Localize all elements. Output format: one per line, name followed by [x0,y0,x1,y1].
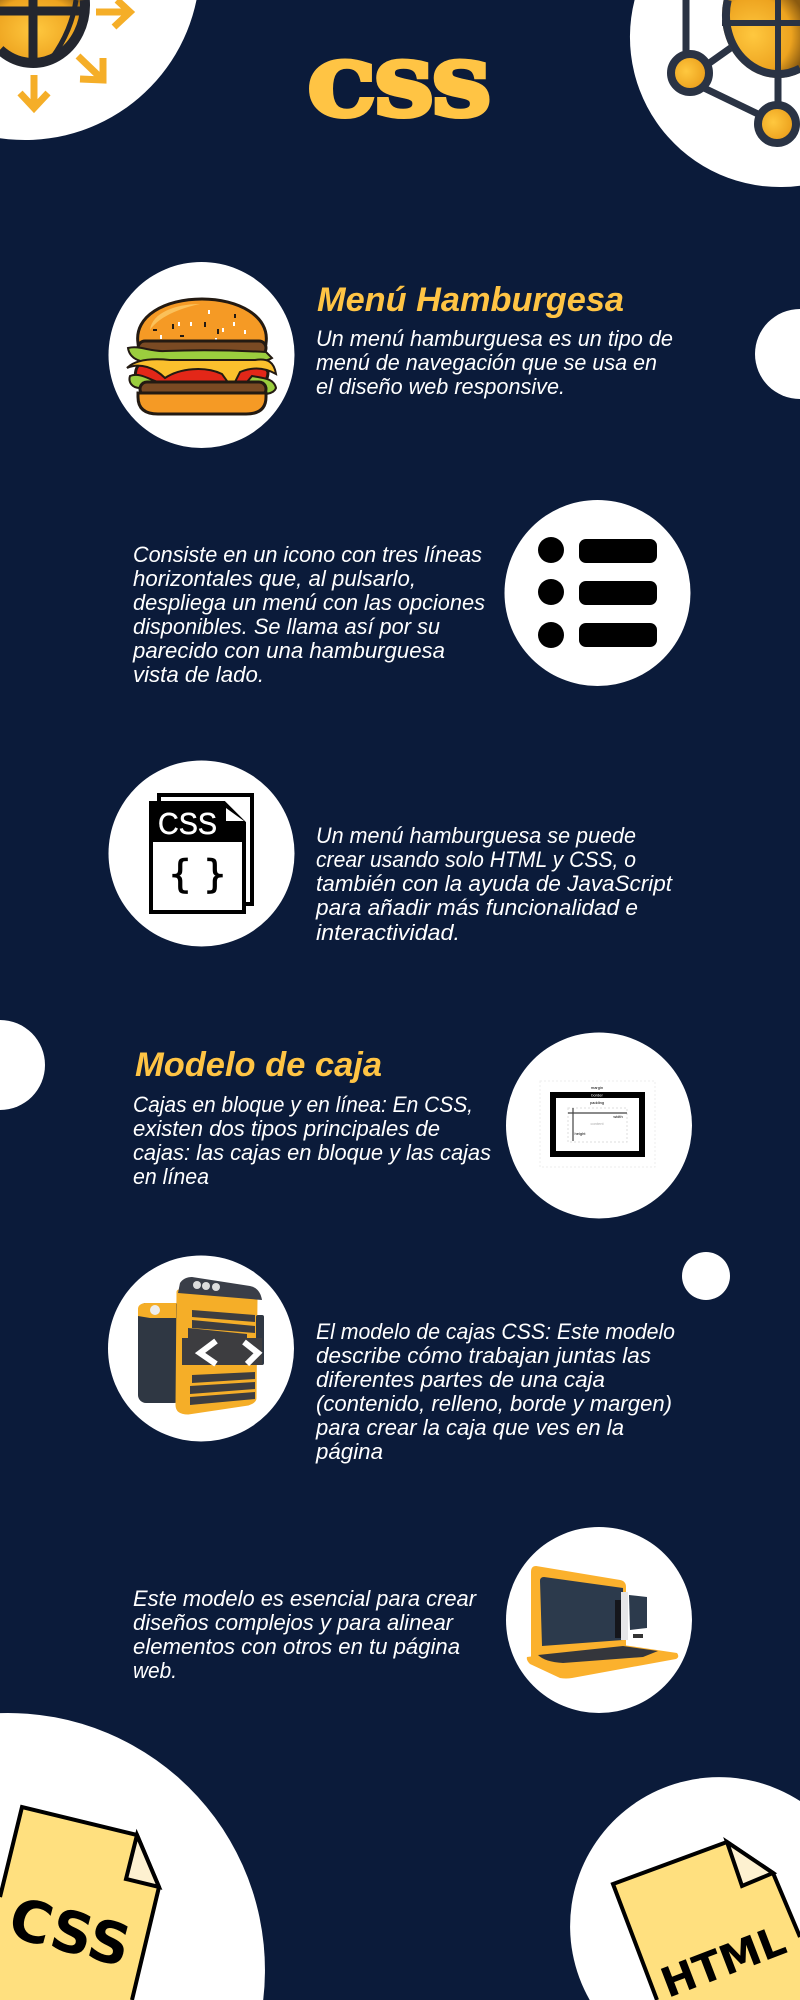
icon: HTML document [613,1842,800,2000]
decoration: bottom left circle with CSS file [0,1713,265,2000]
text block: definition: el diseño web responsive. [316,374,565,399]
text block: box model explanation: diferentes partes de una caja [316,1367,605,1392]
decoration: right edge circle [755,309,800,399]
text block: block and inline: cajas: las cajas en bloque y las cajas [133,1140,491,1165]
icon: box model diagram in circle: border [591,1092,603,1098]
decoration: bottom right circle with HTML file [570,1777,800,2000]
icon: box model diagram in circle: padding [590,1100,604,1105]
decoration: top right circle with globe network [630,0,800,187]
icon: CSS file in circle: { } [168,852,227,896]
title: CSS [309,47,491,132]
icon: laptop in circle [506,1527,692,1713]
text block: block and inline [133,1092,491,1189]
icon: box model diagram in circle: width [613,1114,623,1119]
panel: intro hamburger menu [316,281,673,399]
text block: icon description [132,542,485,687]
icon: CSS document [0,1807,159,2000]
text block: how to build: Un menú hamburguesa se puede [316,823,636,848]
icon: hamburger in circle [108,262,294,448]
text block: definition: Un menú hamburguesa es un tipo de [316,326,673,351]
text block: how to build: para añadir más funcionalidad e [315,895,638,920]
text block: icon description: horizontales que, al pulsarlo, [133,566,416,591]
text block: box model explanation: El modelo de cajas CSS: Este modelo [316,1319,675,1344]
text block: icon description: Consiste en un icono con tres líneas [133,542,482,567]
text block: how to build: interactividad. [316,920,460,945]
icon: box model diagram in circle: content [590,1121,604,1126]
text block: definition [316,326,673,399]
text block: closing statement: elementos con otros en tu página [133,1634,460,1659]
text block: box model explanation: (contenido, relleno, borde y margen) [316,1391,672,1416]
panel: box model intro [133,1046,491,1189]
text block: icon description: disponibles. Se llama así por su [133,614,440,639]
text block: definition: menú de navegación que se usa en [316,350,657,375]
text block: block and inline: Cajas en bloque y en línea: En CSS, [133,1092,473,1117]
text block: closing statement [133,1586,478,1683]
decoration: left edge circle [0,1020,45,1110]
text block: icon description: vista de lado. [133,662,264,687]
text block: box model explanation: para crear la caja que ves en la [315,1415,624,1440]
text block: block and inline: en línea [133,1164,209,1189]
text block: block and inline: existen dos tipos principales de [133,1116,440,1141]
text block: closing statement: diseños complejos y para alinear [133,1610,455,1635]
text block: how to build [315,823,673,945]
text block: box model explanation [315,1319,675,1464]
heading: Modelo de caja: Modelo de caja [135,1046,382,1084]
icon: box model diagram in circle: height [575,1131,586,1136]
text block: icon description: parecido con una hamburguesa [132,638,445,663]
text block: box model explanation: página [315,1439,383,1464]
icon: CSS file in circle: CSS [158,806,217,841]
icon: menu list in circle [504,500,690,686]
icon: box model diagram in circle: margin [591,1085,603,1090]
icon: CSS file in circle [108,760,294,946]
text block: how to build: también con la ayuda de JavaScript [316,871,673,896]
icon: browser window code in circle [108,1256,294,1442]
text block: closing statement: Este modelo es esencial para crear [133,1586,478,1611]
text block: closing statement: web. [133,1658,177,1683]
decoration: small circle [682,1252,730,1300]
text block: how to build: crear usando solo HTML y CSS, o [316,847,636,872]
text block: box model explanation: describe cómo trabajan juntas las [316,1343,651,1368]
text block: icon description: despliega un menú con las opciones [133,590,485,615]
icon: CSS document: CSS [2,1885,137,1981]
decoration: top left circle with globe and arrows [0,0,196,140]
heading: Menú Hamburgesa: Menú Hamburgesa [317,281,624,319]
icon: box model diagram in circle [506,1032,692,1218]
